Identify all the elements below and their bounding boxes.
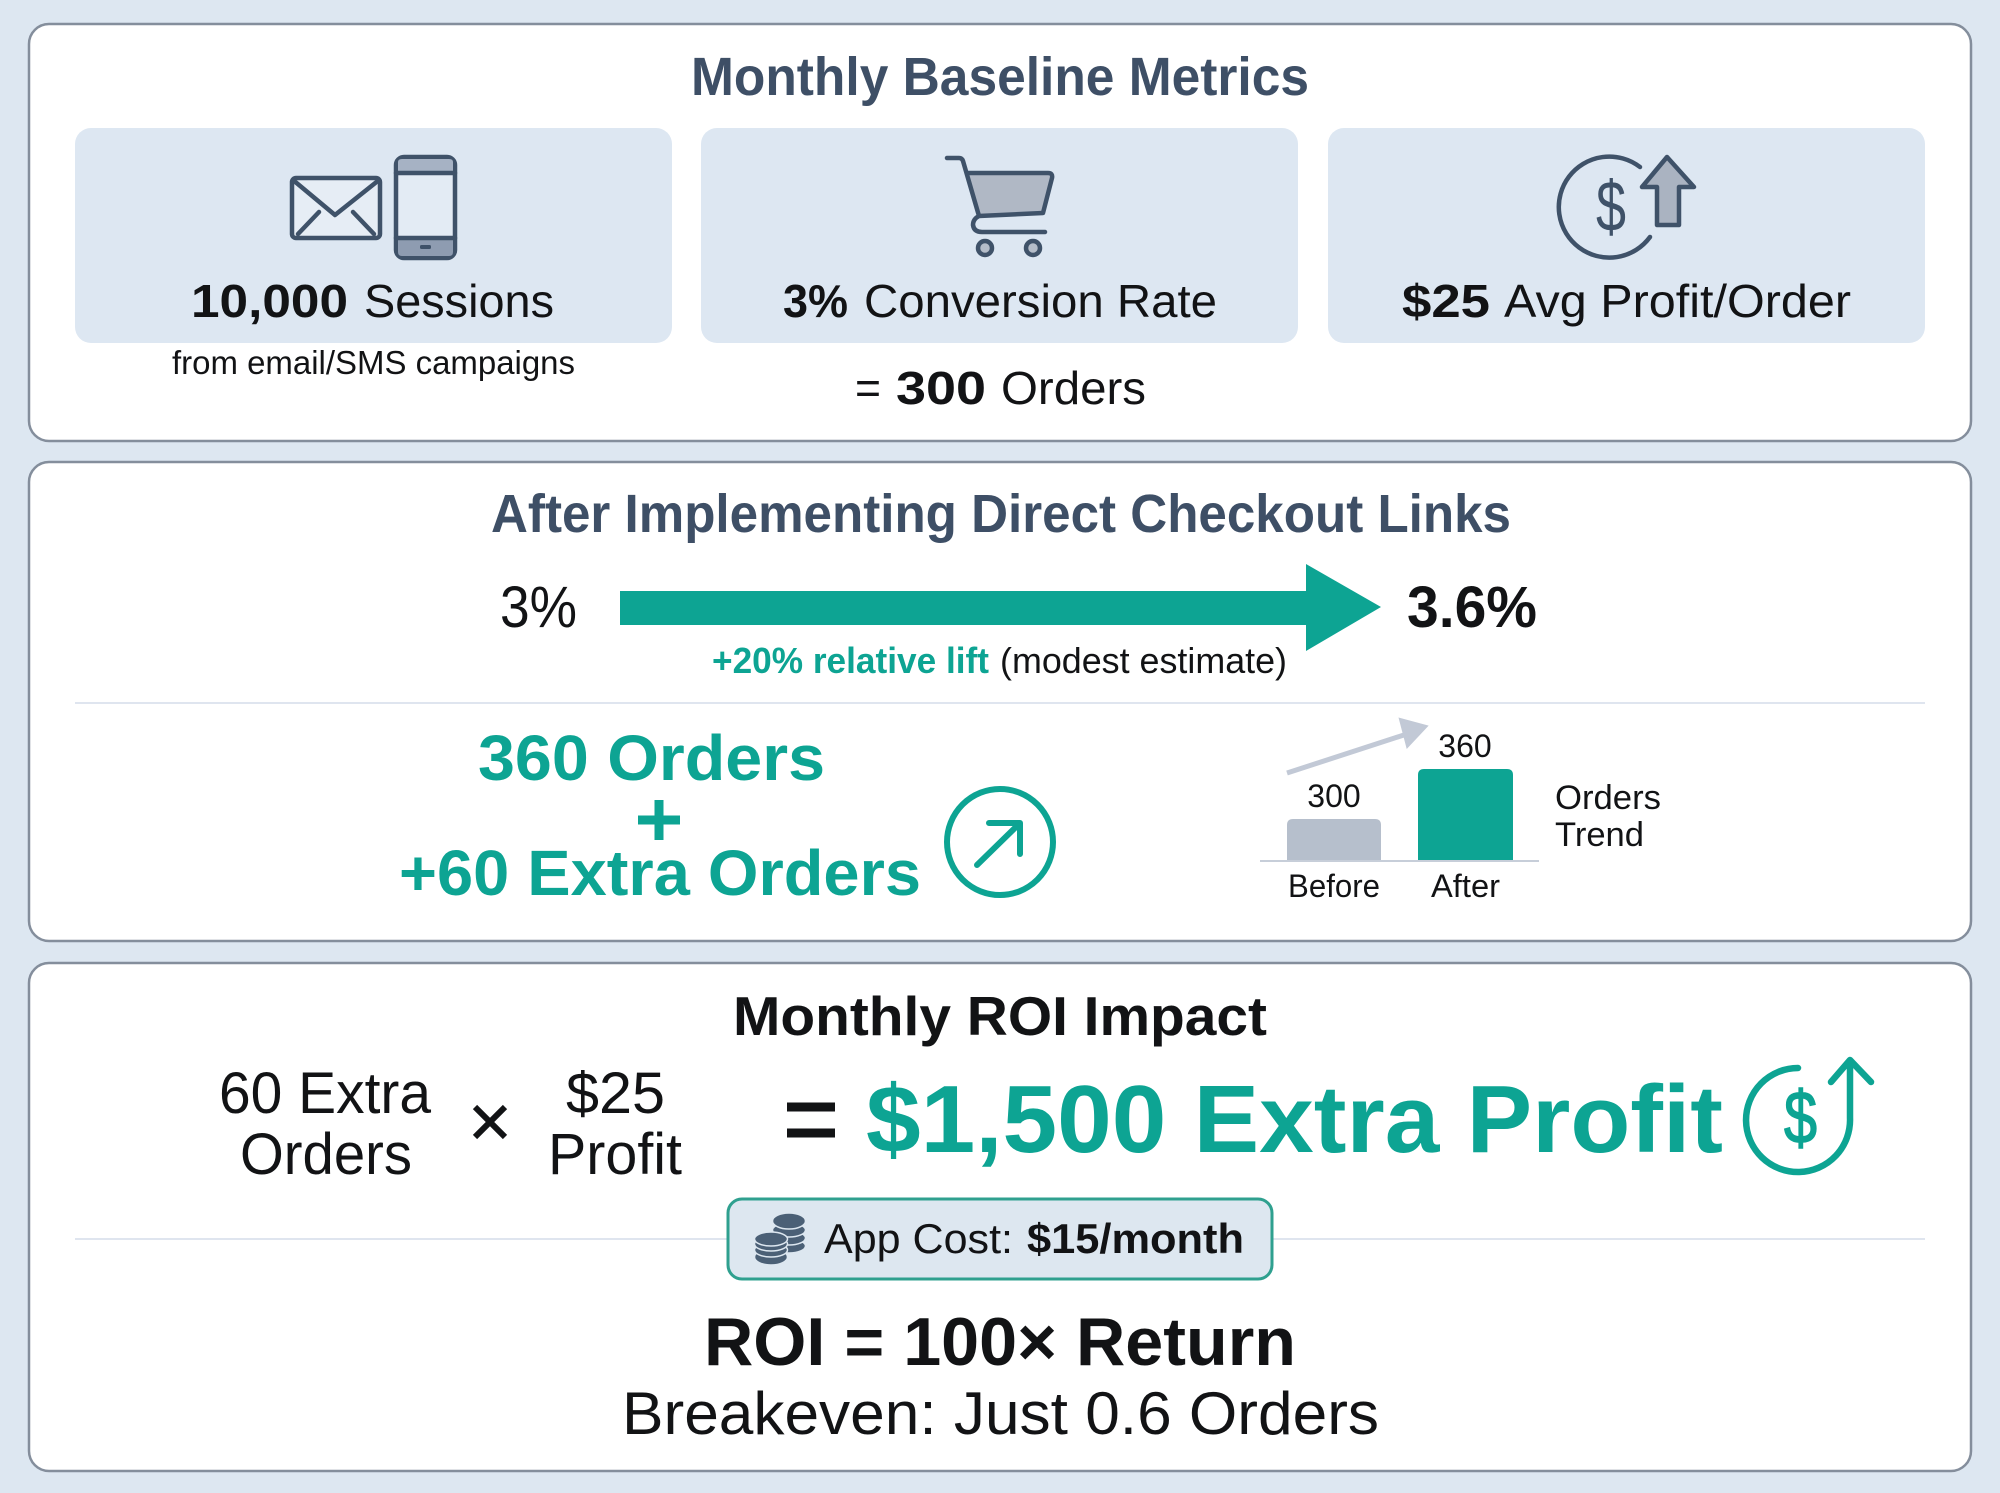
panel: monthly ROI impact (29, 963, 1971, 1471)
heading: after implementing direct checkout links: After Implementing Direct Checkout Links (491, 484, 1511, 544)
metric: 3% conversion rate: Conversion Rate (864, 275, 1217, 327)
panel: after implementing direct checkout links (29, 462, 1971, 941)
equation: extra orders times profit: Orders (240, 1122, 412, 1187)
text: breakeven: Breakeven: Just 0.6 Orders (622, 1380, 1379, 1447)
caption: relative lift: (modest estimate) (1000, 640, 1287, 681)
callout: app cost: $15/month (1027, 1215, 1244, 1262)
callout: app cost: App Cost: (824, 1215, 1013, 1262)
equation: extra orders times profit: Profit (548, 1122, 682, 1187)
arrow: conversion lift (620, 564, 1381, 651)
equation: extra orders times profit: $25 (566, 1061, 665, 1126)
equation: extra orders times profit (219, 1061, 835, 1187)
result: 300 orders (855, 362, 1146, 414)
metric: 3% conversion rate: 3% (783, 275, 848, 327)
icon: dollar with rising arrow (1746, 1060, 1871, 1172)
icon: dollar with rising arrow: $ (1784, 1076, 1817, 1159)
bar chart: orders trend: Orders (1555, 779, 1661, 817)
text: 3.6 percent after: 3.6% (1407, 575, 1537, 640)
icon: dollar coin with up arrow (1559, 157, 1694, 258)
heading: monthly ROI impact: Monthly ROI Impact (733, 985, 1267, 1047)
metric: $25 avg profit/order: Avg Profit/Order (1504, 275, 1851, 327)
arrow: trend (1287, 721, 1424, 773)
result: extra orders (399, 722, 921, 909)
bar chart: orders trend: After (1431, 868, 1500, 904)
bar chart: orders trend: Before (1288, 868, 1380, 904)
bar chart: orders trend: 300 (1307, 778, 1361, 814)
panel: monthly baseline metrics (29, 24, 1971, 441)
card: sessions (75, 128, 672, 343)
bar chart: orders trend: 360 (1438, 728, 1492, 764)
result: extra orders: 360 Orders (478, 722, 825, 794)
metric: 10,000 sessions: 10,000 (191, 275, 348, 327)
bar chart: orders trend: Trend (1555, 816, 1644, 854)
result: extra orders: +60 Extra Orders (399, 837, 921, 909)
bar chart: orders trend (1260, 721, 1661, 904)
card: average profit per order (1328, 128, 1925, 343)
result: 300 orders: Orders (1001, 362, 1146, 414)
result: extra profit: $1,500 Extra Profit (866, 1066, 1723, 1173)
metric: $25 avg profit/order: $25 (1402, 275, 1490, 327)
icon: circled up-right arrow (947, 789, 1053, 895)
result: 300 orders: 300 (896, 362, 986, 414)
text: 3 percent before: 3% (500, 575, 577, 640)
card: conversion rate (701, 128, 1298, 343)
bar: after (1418, 769, 1513, 861)
heading: monthly baseline metrics: Monthly Baseline Metrics (691, 47, 1309, 107)
callout: app cost (728, 1199, 1272, 1279)
caption: relative lift: +20% relative lift (712, 640, 989, 681)
text: from email/SMS campaigns: from email/SMS campaigns (172, 344, 575, 381)
metric: 10,000 sessions (191, 275, 554, 327)
icon: envelope and phone (292, 157, 455, 258)
metric: 10,000 sessions: Sessions (364, 275, 554, 327)
result: ROI return: ROI = 100× Return (704, 1304, 1296, 1380)
icon: coin stacks (754, 1213, 806, 1265)
equation: extra orders times profit: 60 Extra (219, 1061, 432, 1126)
bar: before (1287, 819, 1381, 861)
caption: relative lift (712, 640, 1287, 681)
icon: shopping cart (947, 158, 1052, 255)
result: 300 orders: = (855, 362, 881, 414)
icon: dollar coin with up arrow: $ (1596, 168, 1626, 247)
